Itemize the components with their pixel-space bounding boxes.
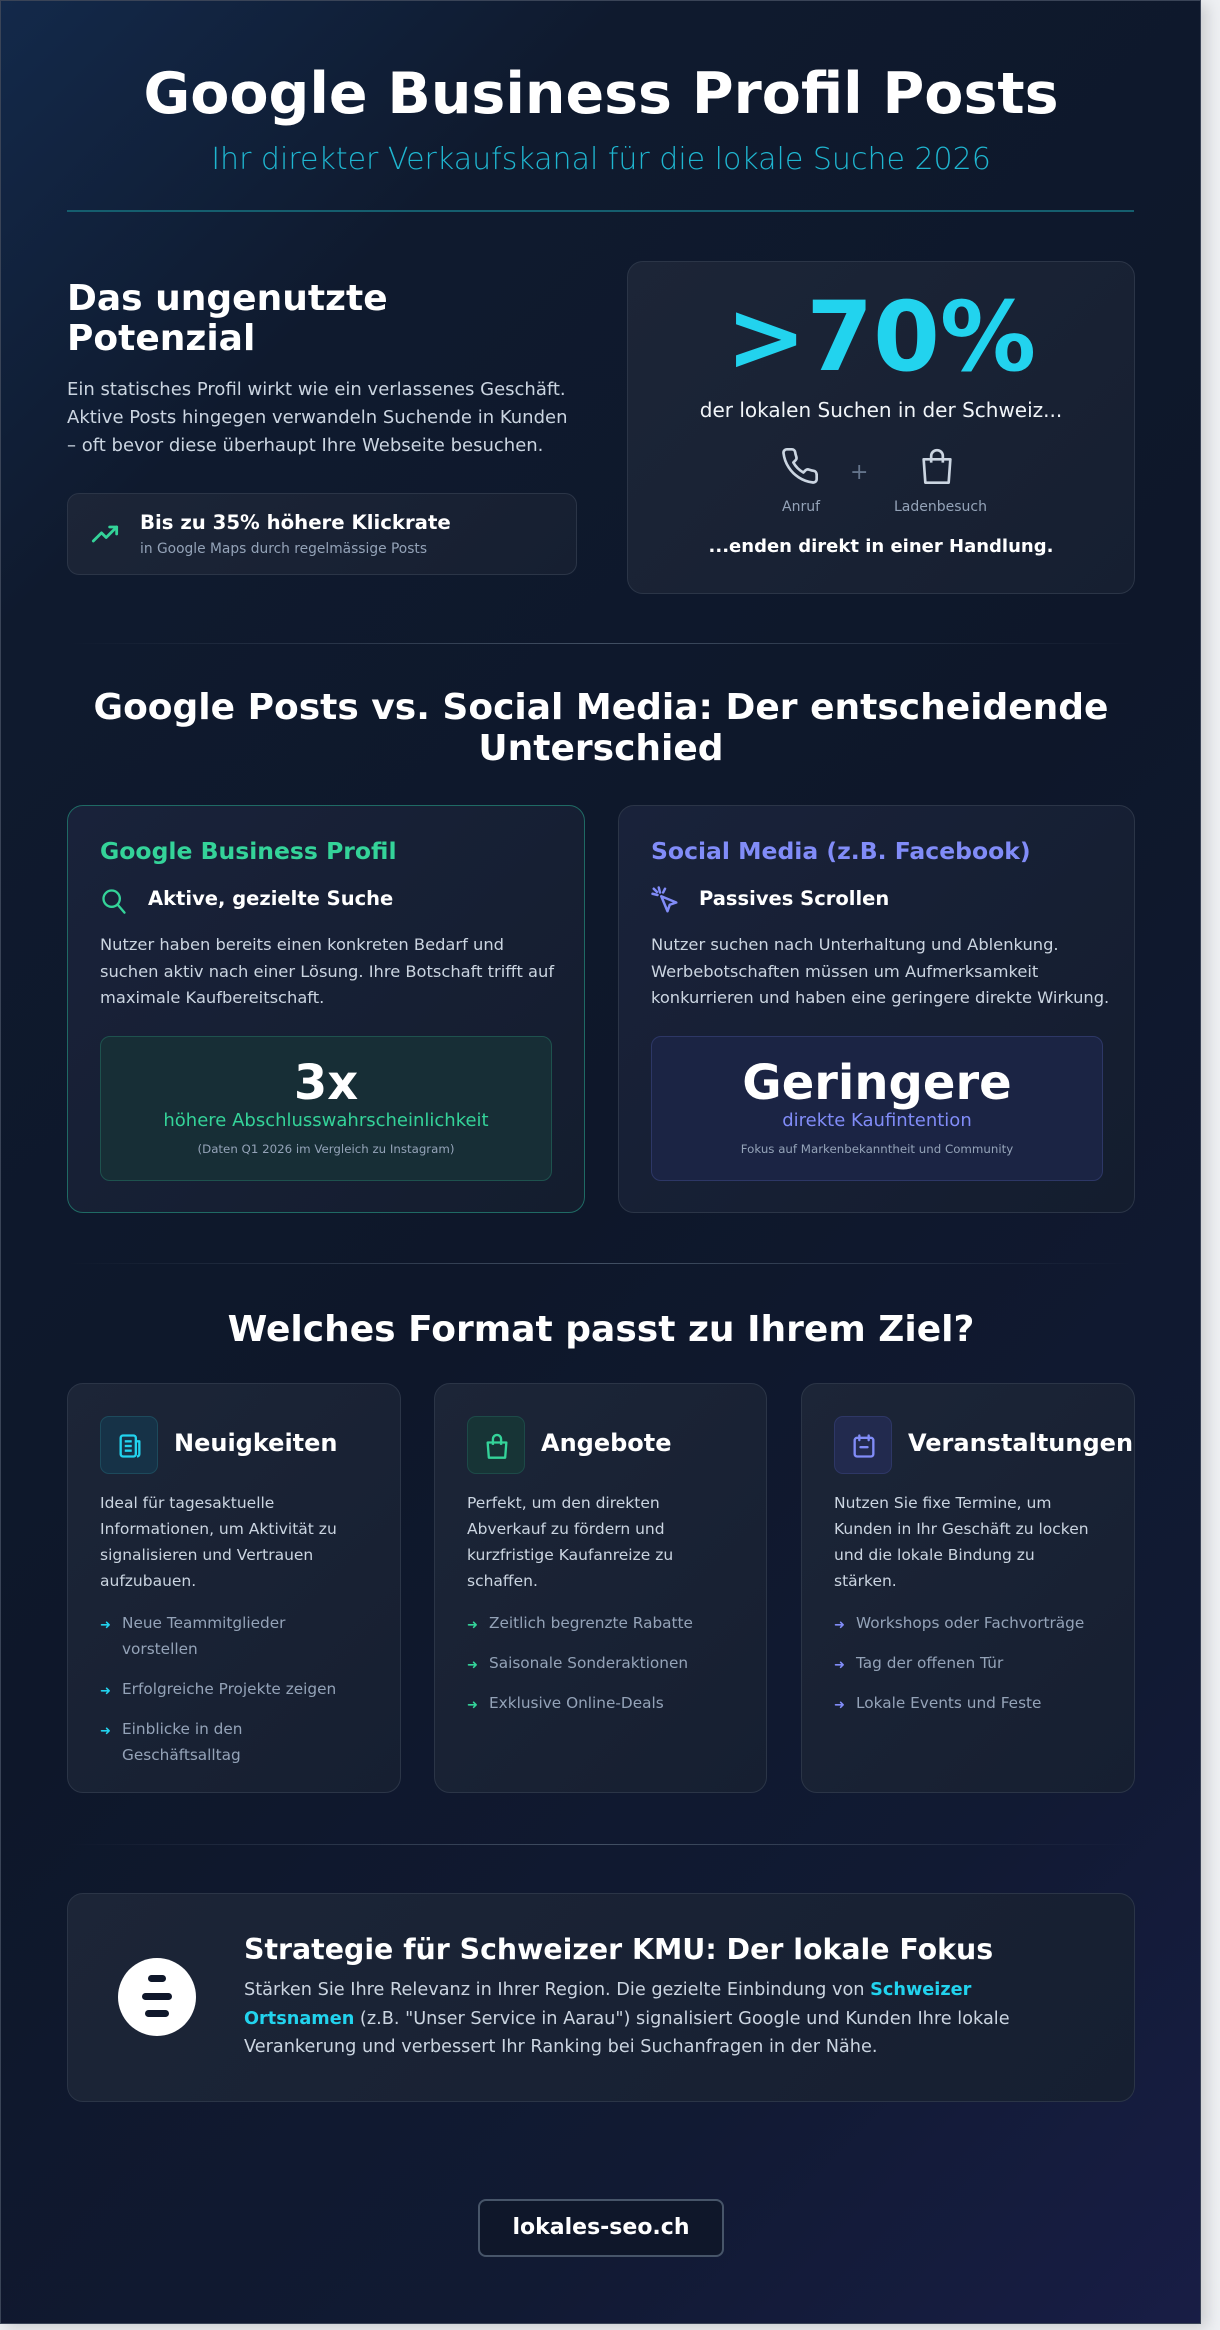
stat box: klickrate: in Google Maps durch regelmässige Posts (140, 541, 427, 557)
stat box: klickrate: Bis zu 35% höhere Klickrate (140, 511, 451, 534)
panel: Neuigkeiten: ➜ (100, 1684, 111, 1699)
heading: Google Posts vs Social Media: Google Posts vs. Social Media: Der entscheidende (94, 687, 1108, 728)
heading: Google Posts vs Social Media (94, 687, 1108, 769)
panel: Angebote: Exklusive Online-Deals (489, 1694, 664, 1712)
panel: Veranstaltungen (801, 1383, 1135, 1793)
icon: bag (467, 1416, 525, 1474)
callout: Geringere: Fokus auf Markenbekanntheit und Community (741, 1142, 1013, 1156)
panel: Neuigkeiten: ➜ (100, 1724, 111, 1739)
panel: Neuigkeiten: ➜ (100, 1618, 111, 1633)
footer button: lokales-seo.ch (512, 2215, 690, 2240)
panel: Angebote: Perfekt, um den direkten Abverkauf zu fördern und kurzfristige Kaufanreize zu schaffen. (467, 1494, 673, 1590)
heading: Welches Format: Welches Format passt zu Ihrem Ziel? (228, 1309, 974, 1350)
panel: Veranstaltungen: Nutzen Sie fixe Termine, um Kunden in Ihr Geschäft zu locken und die lokale Bindung zu stärken. (834, 1494, 1089, 1590)
panel: Veranstaltungen: Tag der offenen Tür (856, 1654, 1003, 1672)
panel: 70% stat (627, 261, 1135, 594)
panel: Veranstaltungen: Workshops oder Fachvorträge (856, 1614, 1084, 1632)
icon: circle (118, 1958, 196, 2036)
icon: bag (922, 448, 952, 484)
title: Google Business Profil Posts (143, 61, 1059, 127)
footer button (478, 2199, 724, 2257)
stat box: klickrate (67, 493, 577, 575)
callout: 3x: 3x (294, 1055, 358, 1111)
panel: Strategie: Strategie für Schweizer KMU: Der lokale Fokus (244, 1933, 993, 1966)
panel: 70% stat: ...enden direkt in einer Handlung. (709, 536, 1053, 557)
callout: 3x (100, 1036, 552, 1181)
subtitle: Ihr direkter Verkaufskanal für die lokale Suche 2026 (211, 142, 991, 177)
panel: Veranstaltungen: ➜ (834, 1698, 845, 1713)
panel: Angebote: Angebote (541, 1429, 672, 1457)
panel: 70% stat: >70% (726, 281, 1036, 393)
panel: Angebote: Saisonale Sonderaktionen (489, 1654, 688, 1672)
callout: 3x: (Daten Q1 2026 im Vergleich zu Instagram) (198, 1142, 454, 1156)
panel: Google Business Profil: Aktive, gezielte Suche (148, 887, 393, 910)
panel: Neuigkeiten: Erfolgreiche Projekte zeigen (122, 1680, 336, 1698)
callout: 3x: höhere Abschlusswahrscheinlichkeit (163, 1110, 489, 1131)
icon: phone (782, 448, 818, 484)
icon: pointer click (651, 886, 678, 912)
heading: Das ungenutzte Potenzial (67, 278, 388, 359)
panel: Google Business Profil: Nutzer haben bereits einen konkreten Bedarf und suchen aktiv nach einer Lösung. Ihre Botschaft trifft auf maximale Kaufbereitschaft. (100, 935, 554, 1007)
icon: newspaper (100, 1416, 158, 1474)
callout: Geringere: Geringere (742, 1055, 1012, 1111)
panel: 70% stat: Ladenbesuch (894, 499, 987, 515)
heading: Das ungenutzte Potenzial: Potenzial (67, 318, 255, 359)
panel: Social Media: Social Media (z.B. Facebook) (651, 837, 1031, 865)
panel: Social Media: Nutzer suchen nach Unterhaltung und Ablenkung. Werbebotschaften müssen um Aufmerksamkeit konkurrieren und haben eine geringere direkte Wirkung. (651, 935, 1109, 1007)
panel: Veranstaltungen: Veranstaltungen (908, 1429, 1133, 1457)
icon: search (102, 889, 126, 914)
icon: calendar (834, 1416, 892, 1474)
panel: Neuigkeiten: Neuigkeiten (174, 1429, 338, 1457)
panel: Neuigkeiten: Einblicke in den Geschäftsalltag (122, 1720, 242, 1764)
panel: Social Media (618, 805, 1135, 1213)
panel: Social Media: Passives Scrollen (699, 887, 889, 910)
panel: Strategie: Stärken Sie Ihre Relevanz in Ihrer Region. Die gezielte Einbindung von Schweizer Ortsnamen (z.B. "Unser Service in Aarau") signalisiert Google und Kunden Ihre lokale Verankerung und verbessert Ihr Ranking bei Suchanfragen in der Nähe. (244, 1980, 1010, 2057)
panel: Angebote: Zeitlich begrenzte Rabatte (489, 1614, 693, 1632)
panel: 70% stat: Anruf (782, 499, 820, 515)
text block: intro: Ein statisches Profil wirkt wie ein verlassenes Geschäft. Aktive Posts hingegen verwandeln Suchende in Kunden – oft bevor diese überhaupt Ihre Webseite besuchen. (67, 379, 567, 456)
panel: Angebote (434, 1383, 767, 1793)
panel: Angebote: ➜ (467, 1698, 478, 1713)
panel: Veranstaltungen: ➜ (834, 1658, 845, 1673)
panel: Angebote: ➜ (467, 1618, 478, 1633)
icon: trend up (92, 526, 118, 542)
panel: Google Business Profil (67, 805, 585, 1213)
callout: Geringere (651, 1036, 1103, 1181)
panel: Veranstaltungen: ➜ (834, 1618, 845, 1633)
panel: Neuigkeiten: Neue Teammitglieder vorstellen (122, 1614, 285, 1658)
panel: Angebote: ➜ (467, 1658, 478, 1673)
callout: Geringere: direkte Kaufintention (782, 1110, 972, 1131)
panel: Neuigkeiten: Ideal für tagesaktuelle Informationen, um Aktivität zu signalisieren und Vertrauen aufzubauen. (100, 1494, 337, 1590)
panel: Veranstaltungen: Lokale Events und Feste (856, 1694, 1041, 1712)
panel: Neuigkeiten (67, 1383, 401, 1793)
panel: 70% stat: der lokalen Suchen in der Schweiz... (700, 398, 1062, 422)
heading: Das ungenutzte Potenzial: Das ungenutzte (67, 278, 388, 319)
panel: Google Business Profil: Google Business Profil (100, 837, 397, 865)
heading: Google Posts vs Social Media: Unterschied (478, 728, 724, 769)
panel: 70% stat: + (850, 460, 868, 485)
panel: Strategie (67, 1893, 1135, 2102)
